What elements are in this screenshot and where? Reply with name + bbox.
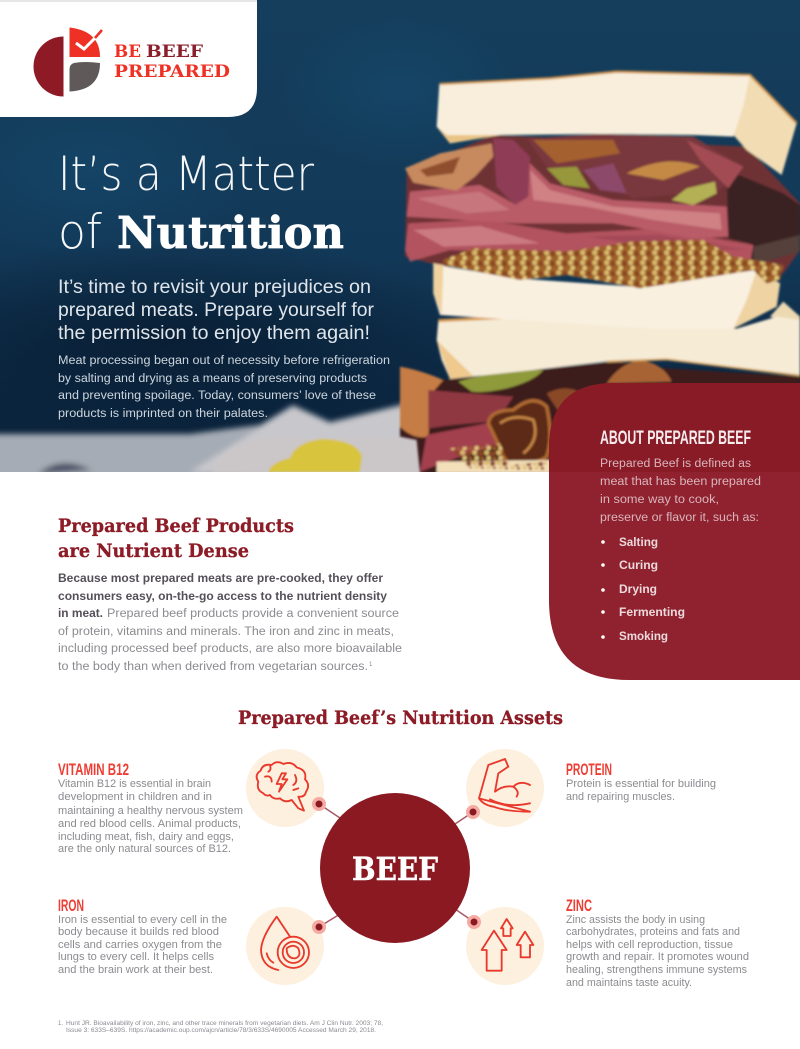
panel text: preserve or flavor it, such as: — [600, 512, 759, 524]
hero title: It’s a Matter — [58, 147, 315, 202]
vitamin b12 text: Vitamin B12 is essential in brain — [58, 778, 211, 790]
zinc text — [566, 897, 749, 989]
zinc text: growth and repair. It promotes wound — [566, 951, 749, 963]
panel text: Prepared Beef is defined as — [600, 458, 751, 470]
zinc text: and maintains taste acuity. — [566, 977, 692, 989]
section text: nutrient dense: including processed beef products, are also more bioavailable — [58, 643, 402, 655]
panel: about prepared beef — [540, 380, 800, 680]
top edge shade — [0, 0, 257, 4]
zinc text: healing, strengthens immune systems — [566, 964, 747, 976]
hero intro: the permission to enjoy them again! — [58, 323, 370, 344]
hero body text: by salting and drying as a means of preserving products — [58, 373, 367, 385]
section text: nutrient dense: in meat. — [58, 608, 103, 620]
hero title: Nutrition — [117, 208, 344, 259]
sandwich photo — [400, 72, 800, 473]
lower layer — [400, 362, 800, 473]
plate and pickle — [216, 438, 364, 472]
iron text: body because it builds red blood — [58, 926, 219, 938]
protein text — [566, 761, 716, 803]
section text: nutrient dense: consumers easy, on-the-go access to the nutrient density — [58, 591, 388, 603]
mustard — [443, 240, 783, 288]
lower meat — [405, 219, 753, 264]
middle bread slice — [433, 263, 780, 329]
hero body text: products is imprinted on their palates. — [58, 408, 268, 420]
icon: muscle arm — [466, 749, 544, 827]
panel text — [600, 458, 761, 524]
section text: nutrient dense: of protein, vitamins and minerals. The iron and zinc in meats, — [58, 626, 394, 638]
footnote: 1. — [58, 1021, 63, 1027]
center circle — [320, 793, 470, 943]
hero body text: Meat processing began out of necessity before refrigeration — [58, 355, 390, 367]
section heading: nutrient dense — [58, 515, 294, 562]
hero body text: and preventing spoilage. Today, consumers’ love of these — [58, 390, 376, 402]
protein text: and repairing muscles. — [566, 791, 675, 803]
vitamin b12 text: are the only natural sources of B12. — [58, 843, 231, 855]
footnote — [58, 1021, 383, 1034]
logo wordmark: BE — [114, 42, 141, 62]
hero body text — [58, 355, 390, 420]
panel list: Salting — [619, 537, 658, 549]
section heading: nutrient dense: are Nutrient Dense — [58, 540, 249, 562]
hero photo background — [0, 0, 800, 480]
iron text: lungs to every cell. It helps cells — [58, 951, 214, 963]
iron text: IRON — [58, 897, 84, 915]
logo wordmark: BEEF — [146, 42, 203, 62]
section heading: nutrition assets: Prepared Beef’s Nutrition Assets — [238, 707, 563, 729]
logo wordmark — [114, 42, 230, 82]
connector lines — [319, 804, 474, 927]
protein text: PROTEIN — [566, 761, 612, 779]
hero intro: It’s time to revisit your prejudices on — [58, 277, 371, 298]
section heading: nutrient dense: Prepared Beef Products — [58, 515, 294, 537]
iron text: and the brain work at their best. — [58, 964, 213, 976]
panel list: Drying — [619, 584, 657, 596]
filling base — [405, 135, 800, 273]
onions and pickle — [527, 134, 743, 198]
hero title: of — [58, 205, 102, 260]
logo wordmark: PREPARED — [114, 62, 230, 82]
section text: nutrient dense: Prepared beef products provide a convenient source — [107, 608, 399, 620]
vitamin b12 text — [58, 761, 243, 855]
iron text — [58, 897, 227, 976]
zinc text: helps with cell reproduction, tissue — [566, 939, 733, 951]
zinc text: ZINC — [566, 897, 592, 915]
dark crust — [726, 174, 800, 260]
center circle: BEEF — [352, 850, 438, 888]
vitamin b12 text: including meat, fish, dairy and eggs, — [58, 831, 234, 843]
vitamin b12 text: maintaining a healthy nervous system — [58, 805, 243, 817]
panel list: Curing — [619, 560, 658, 572]
upper meat — [407, 160, 728, 238]
connector dots — [312, 797, 481, 934]
hero intro: prepared meats. Prepare yourself for — [58, 300, 375, 321]
logo card — [0, 2, 257, 117]
hero title — [58, 147, 344, 260]
section text: nutrient dense — [58, 573, 402, 673]
section text: nutrient dense: to the body than when derived from vegetarian sources. — [58, 661, 368, 673]
vitamin b12 text: development in children and in — [58, 791, 212, 803]
hero intro — [58, 277, 375, 344]
diagram: beef hub — [246, 749, 544, 985]
vitamin b12 text: VITAMIN B12 — [58, 761, 129, 779]
panel text: in some way to cook, — [600, 494, 719, 506]
top bread slice — [733, 75, 797, 175]
panel list: Fermenting — [619, 607, 685, 619]
logo mark — [34, 28, 102, 96]
footnote: Issue 3: 633S–639S. https://academic.oup.com/ajcn/article/78/3/633S/4690005 Accessed March 29, 2018. — [66, 1028, 376, 1034]
section text: nutrient dense: Because most prepared meats are pre-cooked, they offer — [58, 573, 384, 585]
vitamin b12 text: and red blood cells. Animal products, — [58, 818, 241, 830]
iron text: Iron is essential to every cell in the — [58, 914, 227, 926]
zinc text: Zinc assists the body in using — [566, 914, 705, 926]
panel list — [601, 537, 685, 643]
panel list: Smoking — [619, 631, 668, 643]
icon: arrows up — [466, 907, 544, 985]
iron text: cells and carries oxygen from the — [58, 939, 222, 951]
section text: nutrient dense: 1 — [369, 662, 373, 668]
panel text: meat that has been prepared — [600, 476, 761, 488]
footnote: Hunt JR. Bioavailability of iron, zinc, and other trace minerals from vegetarian diets. Am J Clin Nutr. 2003; 78, — [66, 1021, 383, 1027]
zinc text: carbohydrates, proteins and fats and — [566, 926, 740, 938]
icon: blood drop and meat — [246, 907, 324, 985]
lower bread slice — [770, 302, 800, 327]
icon: brain — [246, 749, 324, 827]
protein text: Protein is essential for building — [566, 778, 716, 790]
